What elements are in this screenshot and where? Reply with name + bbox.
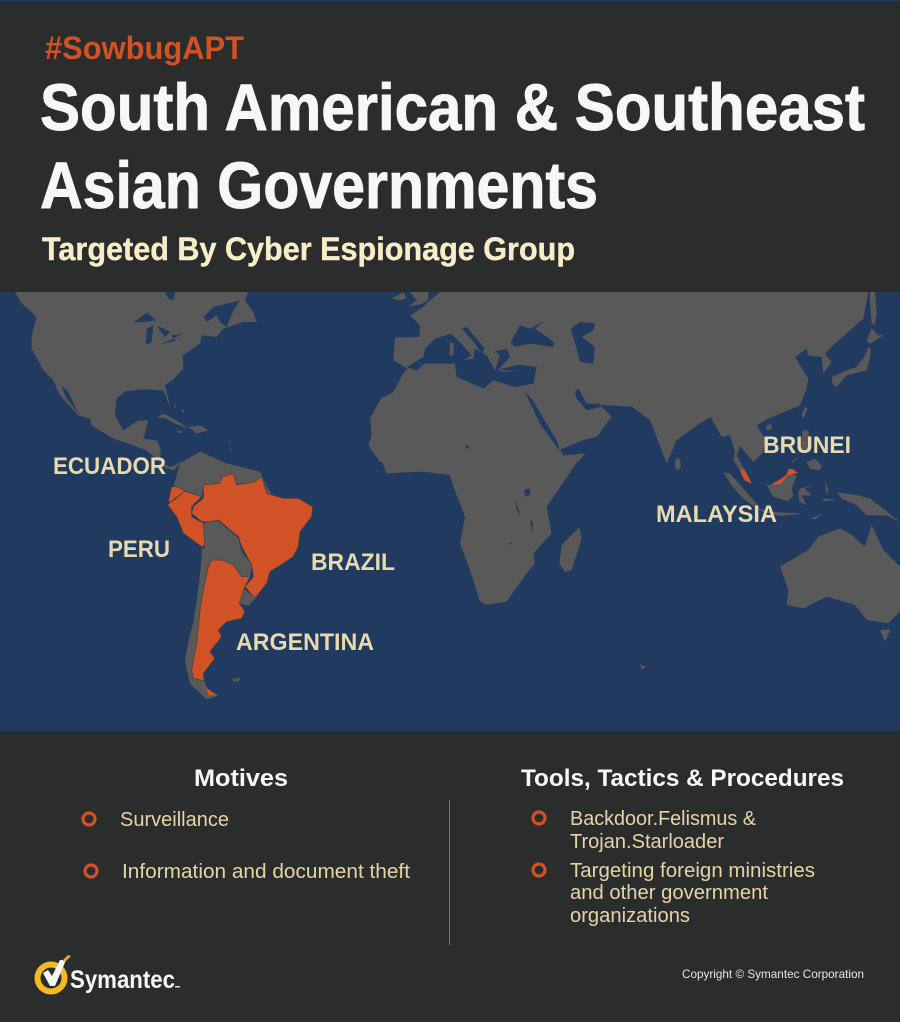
water: mediterranean and adriatic bbox=[407, 327, 537, 389]
tactic: targeting: and other government bbox=[570, 882, 768, 904]
copyright: Copyright © Symantec Corporation bbox=[682, 967, 864, 981]
country: argentina bbox=[192, 560, 250, 681]
americas landmasses bbox=[15, 292, 313, 699]
africa middle east and south asia bbox=[583, 292, 710, 463]
land: sri lanka bbox=[675, 458, 681, 470]
north america bbox=[15, 292, 257, 470]
east asia and archipelagos bbox=[693, 292, 900, 522]
tactic: targeting: Targeting foreign ministries bbox=[570, 860, 815, 882]
land: chile bbox=[185, 547, 218, 699]
country label: peru: PERU bbox=[108, 536, 170, 563]
land: corsica and sardinia bbox=[449, 342, 517, 372]
tactic: targeting: organizations bbox=[570, 905, 690, 927]
land: east asia bbox=[693, 292, 868, 484]
land: kerguelen bbox=[640, 664, 646, 669]
tool: malware: Backdoor.Felismus & bbox=[570, 808, 757, 830]
bullet: malware bbox=[533, 812, 545, 824]
country: peru bbox=[168, 491, 205, 547]
country label: malaysia: MALAYSIA bbox=[656, 501, 777, 528]
country: tierra del fuego bbox=[207, 688, 217, 695]
land: ireland and britain bbox=[392, 292, 428, 306]
land: bolivia and paraguay bbox=[202, 519, 252, 578]
panel: motives bbox=[83, 765, 410, 883]
symantec logo bbox=[38, 955, 180, 994]
subtitle: Targeted By Cyber Espionage Group bbox=[42, 231, 575, 267]
land: sumatra bbox=[723, 472, 758, 509]
header bbox=[40, 30, 865, 267]
tool: malware bbox=[570, 808, 757, 853]
tools heading: Tools, Tactics & Procedures bbox=[521, 765, 844, 792]
bullet: surveillance bbox=[83, 813, 95, 825]
land: borneo bbox=[767, 474, 797, 501]
wordmark: Symantec bbox=[70, 966, 175, 994]
land: sulawesi, java, moluccas bbox=[758, 482, 837, 519]
land: madagascar bbox=[559, 527, 582, 572]
country label: brazil: BRAZIL bbox=[311, 549, 395, 576]
land: japan and sakhalin bbox=[832, 292, 883, 387]
old world landmasses bbox=[368, 292, 900, 669]
land: southern africa bbox=[380, 457, 578, 605]
icon: check ring bbox=[38, 955, 71, 992]
bullet: theft bbox=[85, 865, 97, 877]
country label: brunei: BRUNEI bbox=[763, 432, 851, 459]
panel: tools, tactics and procedures bbox=[521, 765, 844, 927]
country: peninsular malaysia bbox=[740, 469, 752, 484]
land: falklands bbox=[230, 677, 241, 682]
country: east malaysia and brunei bbox=[771, 469, 798, 485]
country: brazil bbox=[192, 473, 313, 598]
tool: malware: Trojan.Starloader bbox=[570, 831, 724, 853]
land: colombia venezuela guianas bbox=[173, 452, 272, 497]
country label: ecuador: ECUADOR bbox=[53, 453, 166, 480]
europe and north africa bbox=[368, 292, 600, 462]
land: australia bbox=[780, 525, 900, 623]
world map bbox=[0, 292, 900, 731]
land: north america bbox=[15, 292, 257, 470]
tactic: targeting bbox=[570, 860, 815, 927]
land: tasmania bbox=[880, 629, 891, 642]
land: caribbean islands bbox=[157, 404, 232, 451]
bullet: targeting bbox=[533, 864, 545, 876]
motives heading: Motives bbox=[194, 765, 288, 792]
land: hainan and taiwan bbox=[767, 407, 807, 430]
land: philippines bbox=[792, 430, 822, 470]
title bbox=[40, 70, 865, 222]
country: ecuador bbox=[168, 487, 185, 502]
water: east african lakes bbox=[508, 488, 533, 545]
country label: argentina: ARGENTINA bbox=[236, 629, 374, 656]
motive: information theft: Information and document theft bbox=[122, 861, 410, 883]
hashtag: #SowbugAPT bbox=[45, 30, 244, 66]
land: europe and north africa bbox=[368, 292, 600, 462]
water: black sea, caspian, red sea, persian gulf, lake chad bbox=[465, 320, 600, 450]
title: Asian Governments bbox=[40, 148, 598, 222]
water: gulf of california, great lakes, st lawrence, hudson bbox=[62, 292, 240, 414]
motive: surveillance: Surveillance bbox=[120, 809, 229, 831]
land: uruguay bbox=[239, 588, 256, 606]
land: new guinea bbox=[837, 492, 900, 522]
